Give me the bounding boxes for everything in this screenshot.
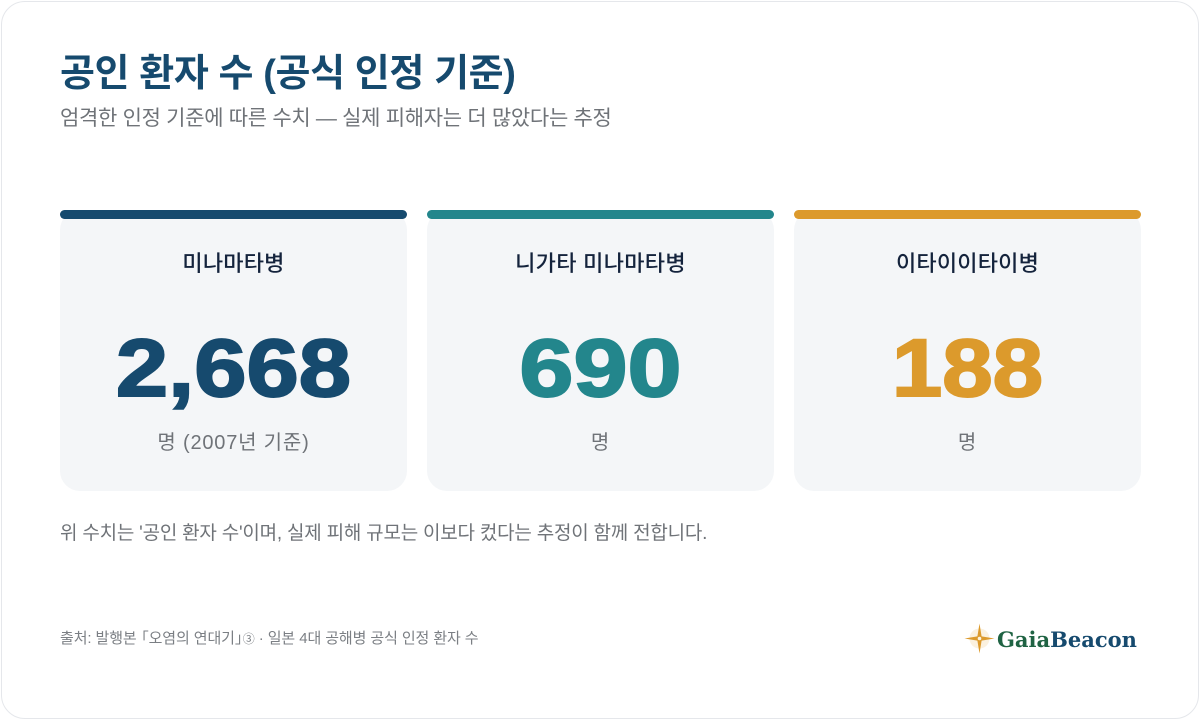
logo: GaiaBeacon bbox=[964, 624, 1137, 654]
number: 690: 690 bbox=[519, 323, 682, 414]
unit label: Itai-itai: 명 bbox=[958, 432, 977, 454]
title: 공인 환자 수 (공식 인정 기준) bbox=[60, 53, 515, 95]
unit label: Minamata: 명 (2007년 기준) bbox=[157, 432, 310, 454]
source footnote: 출처: 발행본 「오염의 연대기」③ · 일본 4대 공해병 공식 인정 환자 수 bbox=[60, 630, 478, 647]
panel: Niigata Minamata disease bbox=[427, 210, 774, 491]
subtitle: 엄격한 인정 기준에 따른 수치 — 실제 피해자는 더 많았다는 추정 bbox=[60, 107, 612, 130]
panel: Minamata disease bbox=[60, 210, 407, 491]
card heading: Itai-itai: 이타이이타이병 bbox=[896, 251, 1039, 276]
unit label: Niigata: 명 bbox=[591, 432, 610, 454]
card heading: Minamata: 미나마타병 bbox=[182, 251, 285, 276]
note text: 위 수치는 '공인 환자 수'이며, 실제 피해 규모는 이보다 컸다는 추정이 함께 전합니다. bbox=[60, 523, 707, 544]
number: 2,668: 2,668 bbox=[116, 323, 351, 414]
card heading: Niigata Minamata: 니가타 미나마타병 bbox=[515, 251, 686, 276]
number: 188: 188 bbox=[892, 323, 1043, 414]
wordmark: GaiaBeacon bbox=[997, 627, 1137, 652]
icon: four-point star bbox=[964, 624, 994, 654]
panel: Itai-itai disease bbox=[794, 210, 1141, 491]
